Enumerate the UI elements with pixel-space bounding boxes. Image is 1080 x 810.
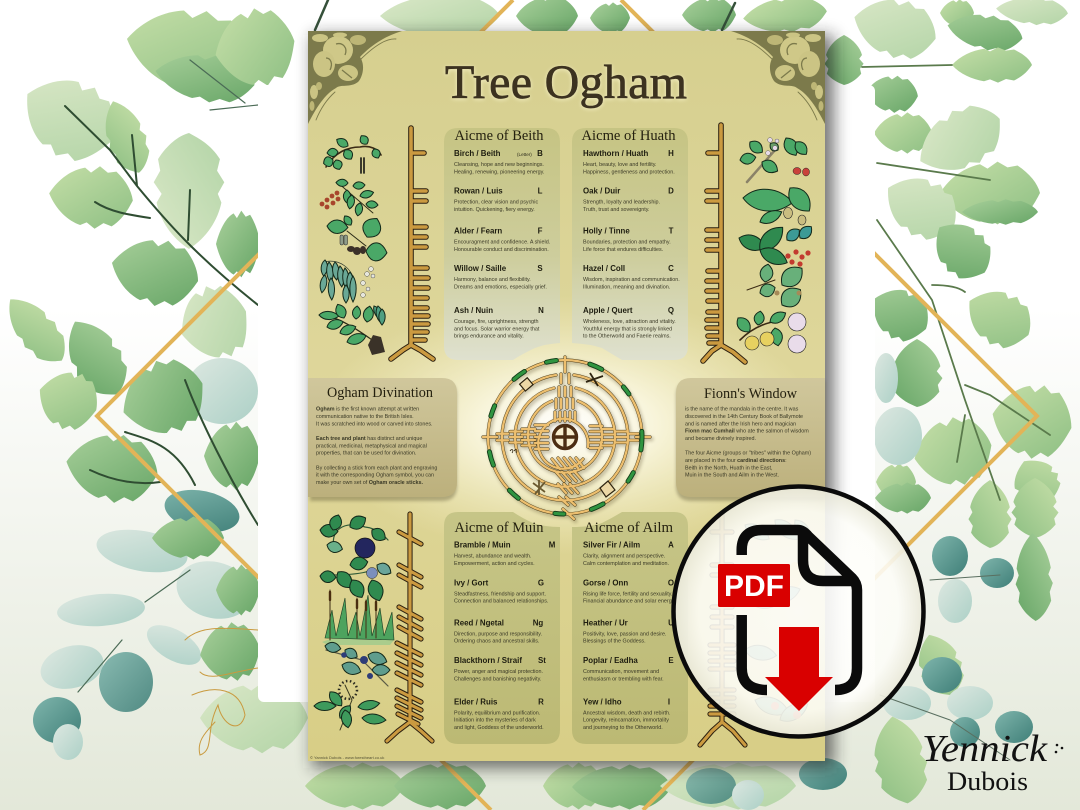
row: oak: Truth, trust and sovereignty.	[583, 207, 650, 213]
poster shadow	[312, 35, 834, 768]
plant: hawthorn	[739, 135, 810, 182]
row: oak: Oak / Duir	[583, 187, 620, 196]
row: bramble: Bramble / Muin	[454, 541, 511, 550]
row: hazel: Illumination, meaning and divination.	[583, 284, 670, 290]
centre wheel	[554, 426, 576, 448]
panel: Fionn's Window: The four Aicme (groups or "tribes" within the Ogham)	[685, 451, 811, 457]
row: willow: S	[537, 264, 543, 273]
panel: Fionn's Window: and became divinely inspired.	[685, 436, 756, 442]
row: rowan	[454, 187, 543, 213]
panel: Fionn's Window: Fionn mac Cumhail who ate the salmon of wisdom	[685, 429, 809, 435]
row: willow: Harmony, balance and flexibility.	[454, 277, 531, 283]
row: rowan: intuition. Quickening, fiery energy.	[454, 207, 535, 213]
panel: Ogham Divination: practical, medicinal, metaphysical and magical	[316, 443, 427, 449]
foliage: bottom strip	[305, 758, 847, 810]
row: poplar: Poplar / Eadha	[583, 656, 638, 665]
row: ivy: Ivy / Gort	[454, 578, 489, 587]
row: elder: Elder / Ruis	[454, 697, 498, 706]
row: reed	[454, 618, 543, 645]
row: heather: Heather / Ur	[583, 618, 628, 627]
panel: Ogham Divination: It was scratched into wood or carved into stones.	[316, 421, 433, 427]
row: birch: (Letter)	[517, 152, 532, 157]
row: yew: Ancestral wisdom, death and rebirth.	[583, 710, 670, 716]
row: reed: Ordering chaos and ancestral skills.	[454, 639, 539, 645]
row: heather: Blessings of the Goddess.	[583, 639, 646, 645]
panel: Ogham Divination: it with the corresponding Ogham symbol, you can	[316, 473, 434, 479]
row: silver fir: Calm contemplation and meditation.	[583, 561, 669, 567]
text block: Ogham is the first known attempt at written	[316, 407, 419, 413]
plant: alder	[327, 214, 388, 262]
row: ash: brings endurance and vitality.	[454, 334, 524, 340]
row: hazel	[583, 264, 680, 290]
row: holly	[583, 227, 674, 253]
heading: Aicme of Ailm	[584, 520, 674, 536]
row: reed: Reed / Ngetal	[454, 618, 504, 627]
row: gorse: Gorse / Onn	[583, 578, 628, 587]
row: ash: Ash / Nuin	[454, 306, 493, 315]
row: elder: R	[538, 697, 544, 706]
stick: Aicme of Huath	[703, 125, 745, 362]
panel: Ogham Divination: Each tree and plant has distinct and unique	[316, 436, 422, 442]
plant: rowan	[320, 179, 378, 216]
plant: apple	[734, 309, 806, 353]
row: apple: Q	[668, 306, 674, 315]
row: holly: Life force that endures difficulties.	[583, 247, 663, 253]
row: poplar: E	[668, 656, 674, 665]
icon: document outline	[742, 530, 857, 690]
poster	[308, 31, 825, 761]
foliage: right branch	[824, 0, 1078, 808]
row: birch: Healing, renewing, pioneering energy.	[454, 169, 544, 175]
plant: oak	[742, 182, 816, 227]
row: yew: Longevity, reincarnation, immortality	[583, 718, 669, 724]
row: oak	[583, 187, 674, 213]
row: heather: U	[668, 618, 674, 627]
row: hawthorn: Heart, beauty, love and fertility.	[583, 162, 657, 168]
row: poplar: enthusiasm or trembling with fear.	[583, 676, 664, 682]
panel: Fionn's Window: discovered in the 14th Century Book of Ballymote	[685, 414, 803, 420]
row: holly: Holly / Tinne	[583, 227, 630, 236]
plant: elder	[314, 681, 386, 730]
row: hawthorn	[583, 149, 675, 175]
plant: reed	[322, 590, 394, 645]
arrow: download	[765, 627, 833, 711]
row: ash: Courage, fire, uprightness, strength	[454, 319, 539, 325]
row: bramble: Harvest, abundance and wealth.	[454, 554, 531, 560]
centre glow	[308, 280, 825, 580]
mandala: Fionn's Window	[483, 357, 652, 521]
icon: PDF label	[718, 564, 790, 607]
gold squiggle	[185, 628, 258, 755]
row: alder: Encouragment and confidence. A shield.	[454, 240, 550, 246]
row: elder: and light, Goddess of the underworld.	[454, 725, 544, 731]
row: gorse: Rising life force, fertility and sexuality.	[583, 591, 672, 597]
row: alder	[454, 227, 550, 253]
row: gorse	[583, 578, 676, 605]
heading: Aicme of Muin	[454, 520, 544, 536]
row: blackthorn: Challenges and banishing negativity.	[454, 676, 541, 682]
row: alder: Alder / Fearn	[454, 227, 502, 236]
row: hazel: Hazel / Coll	[583, 264, 625, 273]
panel: Fionn's Window: Muin in the South and Ailm in the West.	[685, 473, 779, 479]
plant: ash	[319, 302, 385, 355]
foliage: left branch	[0, 0, 308, 760]
row: gorse: Financial abundance and solar energy.	[583, 599, 676, 605]
plant: blackthorn	[324, 641, 390, 686]
row: reed: Ng	[533, 618, 543, 627]
row: elder: Polarity, equilibrium and purification.	[454, 710, 540, 716]
plant: ivy	[319, 556, 394, 603]
panel: Fionn's Window: and is named after the Irish hero and magician	[685, 421, 796, 427]
row: hawthorn: H	[668, 149, 674, 158]
heading: Aicme of Huath	[582, 128, 676, 144]
vine	[488, 360, 642, 514]
row: heather	[583, 618, 674, 645]
panel: Fionn's Window: Beith in the North, Huath in the East,	[685, 465, 773, 471]
row: yew: I	[668, 697, 670, 706]
row: ivy: G	[538, 578, 544, 587]
foliage: top strip	[315, 0, 828, 38]
row: ash	[454, 306, 544, 340]
row: blackthorn: Power, anger and magical protection.	[454, 669, 543, 675]
row: ash: and focus. Solar warrior energy that	[454, 326, 540, 332]
plant: willow	[319, 260, 375, 303]
row: reed: Direction, purpose and responsibility.	[454, 631, 542, 637]
stick: Aicme of Ailm	[700, 514, 745, 745]
signature: Yennick Dubois	[922, 728, 1063, 796]
poster ground	[308, 31, 825, 761]
row: blackthorn	[454, 656, 546, 682]
row: alder: F	[538, 227, 543, 236]
row: ivy	[454, 578, 548, 605]
row: hazel: Wisdom, inspiration and communication.	[583, 277, 680, 283]
corner ornament left	[308, 31, 402, 124]
copyright line: © Yannick Dubois - www.forestheart.co.uk	[310, 755, 384, 760]
heading: Aicme of Beith	[454, 128, 544, 144]
row: blackthorn: Blackthorn / Straif	[454, 656, 522, 665]
row: birch: Cleansing, hope and new beginnings.	[454, 162, 544, 168]
row: apple	[583, 306, 676, 340]
row: silver fir: Clarity, alignment and perspective.	[583, 554, 665, 560]
row: rowan: L	[538, 187, 543, 196]
panel: Ogham Divination: properties, that can be used for divination.	[316, 451, 416, 457]
stick: Aicme of Beith	[391, 128, 433, 359]
row: rowan: Protection, clear vision and psychic	[454, 200, 538, 206]
row: birch: B	[537, 149, 543, 158]
small engraved symbols	[510, 373, 615, 497]
panel: Ogham Divination: communication native to the British Isles.	[316, 414, 414, 420]
row: silver fir: Silver Fir / Ailm	[583, 541, 640, 550]
row: birch	[454, 149, 544, 175]
row: bramble: M	[549, 541, 556, 550]
row: ash: N	[538, 306, 544, 315]
row: elder: Initiation into the mysteries of dark	[454, 718, 536, 724]
row: heather: Positivity, love, passion and desire.	[583, 631, 666, 637]
PDF lens badge	[674, 486, 924, 736]
signature: Yennick Dubois: Yennick	[922, 728, 1048, 770]
panel: Aicme of Ailm	[572, 512, 688, 744]
plants: Ailm column (behind lens)	[742, 515, 817, 726]
row: rowan: Rowan / Luis	[454, 187, 503, 196]
panel: Ogham Divination	[308, 378, 457, 501]
row: poplar: Communication, movement and	[583, 669, 659, 675]
row: apple: Youthful energy that is strongly linked	[583, 326, 672, 332]
row: holly: Boundaries, protection and empathy.	[583, 240, 671, 246]
panel: Fionn's Window	[676, 378, 825, 501]
row: willow: Willow / Saille	[454, 264, 507, 273]
plant: birch	[322, 133, 382, 173]
row: blackthorn: St	[538, 656, 546, 665]
icon: PDF label: PDF	[724, 570, 784, 603]
heading: Fionn's Window	[704, 386, 797, 402]
heading: Ogham Divination	[327, 385, 433, 401]
panel: Ogham Divination: By collecting a stick from each plant and engraving	[316, 465, 437, 471]
row: holly: T	[669, 227, 674, 236]
row: yew: Yew / Idho	[583, 697, 622, 706]
row: gorse: O	[668, 578, 674, 587]
row: elder	[454, 697, 544, 731]
row: willow: Dreams and emotions, especially grief.	[454, 284, 547, 290]
row: birch: Birch / Beith	[454, 149, 501, 158]
plant: holly	[737, 222, 815, 269]
row: oak: D	[668, 187, 674, 196]
panel: Aicme of Beith	[444, 128, 560, 360]
row: willow	[454, 264, 547, 290]
row: apple: Wholeness, love, attraction and vitality.	[583, 319, 676, 325]
row: hawthorn: Hawthorn / Huath	[583, 149, 648, 158]
stick: Aicme of Muin	[387, 514, 432, 741]
panel: Aicme of Muin	[444, 512, 560, 744]
row: hazel: C	[668, 264, 674, 273]
row: ivy: Steadfastness, friendship and support.	[454, 591, 546, 597]
panel: Aicme of Huath	[572, 128, 688, 360]
title: Tree Ogham	[445, 56, 687, 109]
row: bramble	[454, 541, 556, 567]
row: silver fir	[583, 541, 674, 567]
plants: Huath column	[734, 135, 816, 353]
row: yew	[583, 697, 670, 731]
text block: is the name of the mandala in the centre. It was	[685, 407, 799, 413]
corner ornament right	[731, 31, 825, 124]
row: oak: Strength, loyalty and leadership.	[583, 200, 660, 206]
panel: Ogham Divination: make your own set of Ogham oracle sticks.	[316, 480, 423, 486]
plant: bramble	[319, 513, 388, 558]
row: yew: and journeying to the Otherworld.	[583, 725, 663, 731]
row: silver fir: A	[668, 541, 674, 550]
row: hawthorn: Happiness, gentleness and protection.	[583, 169, 675, 175]
signature: Yennick Dubois: Dubois	[947, 767, 1028, 796]
row: apple: to the Otherworld and Faerie realms.	[583, 334, 671, 340]
plant: hazel	[747, 261, 808, 312]
row: ivy: Connection and balanced relationships.	[454, 599, 548, 605]
panel: Fionn's Window: are placed in the four cardinal directions:	[685, 458, 787, 464]
white backing card	[258, 85, 875, 702]
row: bramble: Empowerment, action and cycles.	[454, 561, 535, 567]
row: poplar	[583, 656, 674, 682]
row: alder: Honourable conduct and discrimination.	[454, 247, 549, 253]
plants: Beith column	[319, 133, 388, 355]
plants: Muin column	[314, 513, 394, 730]
row: apple: Apple / Quert	[583, 306, 633, 315]
